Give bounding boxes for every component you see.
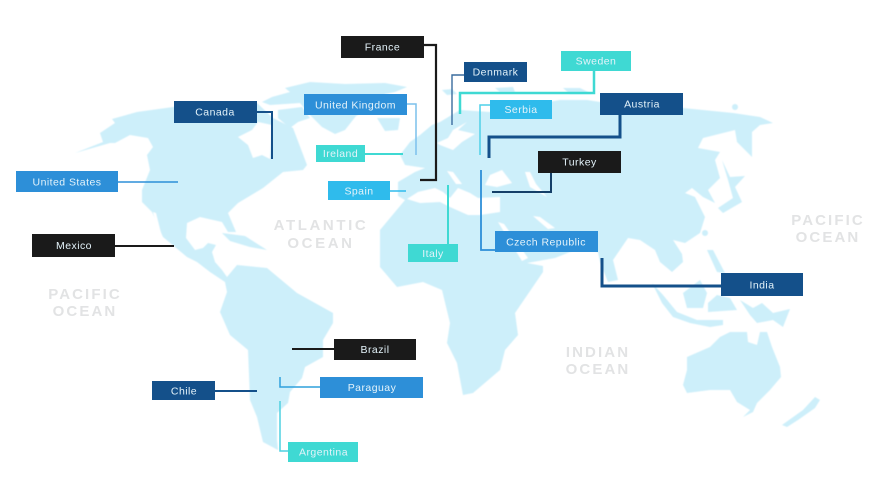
Taiwan (702, 230, 708, 236)
landmass: Iceland (377, 118, 400, 131)
Arctic islands (442, 89, 457, 95)
Sulawesi (708, 295, 737, 312)
callout: Austria (489, 93, 683, 158)
label: Atlantic Ocean: OCEAN (287, 235, 355, 252)
Hudson Bay (238, 122, 272, 159)
callout: Ireland (316, 145, 403, 162)
callout: Czech Republic: Czech Republic (506, 236, 586, 248)
callout: Denmark: Denmark (473, 66, 519, 78)
label: Indian Ocean: OCEAN (566, 361, 630, 378)
callout: Sweden: Sweden (576, 56, 616, 68)
Sumatra and Java (652, 283, 723, 327)
label: Atlantic Ocean: ATLANTIC (274, 217, 368, 234)
Borneo (683, 280, 707, 308)
islands of the Arctic, Asia and Oceania (222, 87, 820, 427)
world map landmasses (75, 82, 820, 450)
label: Pacific Ocean west: OCEAN (53, 303, 117, 320)
callout: Denmark (452, 62, 527, 125)
callout: France (341, 36, 436, 180)
callout: Serbia: Serbia (504, 104, 538, 116)
Adriatic Sea (447, 171, 462, 184)
callout: Sweden (460, 51, 631, 114)
ocean labels (48, 212, 865, 378)
callout: Austria: Austria (624, 98, 660, 110)
Black Sea (485, 170, 512, 187)
Gulf of California (153, 212, 161, 233)
callout: India: India (749, 280, 775, 292)
callout: United Kingdom: United Kingdom (315, 100, 396, 112)
callout: Chile (152, 381, 257, 400)
callout: United States: United States (33, 176, 101, 188)
Baltic Sea (437, 122, 475, 150)
Caribbean islands (222, 233, 267, 250)
callout: Paraguay (280, 377, 423, 398)
Arctic islands (563, 88, 592, 94)
Philippines (707, 250, 725, 273)
callout: Ireland: Ireland (323, 148, 358, 160)
callout: Argentina (280, 401, 358, 462)
Caspian Sea (525, 172, 547, 197)
callout: Italy: Italy (422, 248, 444, 260)
callout: Brazil (292, 339, 416, 360)
Mediterranean Sea (407, 188, 500, 215)
callout: Spain (328, 181, 406, 200)
Baffin Island (278, 107, 310, 128)
callout: Argentina: Argentina (299, 446, 348, 458)
callout: Turkey: Turkey (562, 156, 597, 168)
callout: India (602, 258, 803, 296)
Arctic islands (495, 87, 515, 92)
New Guinea (740, 300, 790, 327)
callout: Spain: Spain (344, 186, 374, 198)
label: Pacific Ocean west: PACIFIC (48, 286, 122, 303)
landmass: the Americas (75, 103, 333, 450)
New Zealand (782, 397, 820, 427)
callout: United States (16, 171, 178, 192)
Japan (718, 160, 745, 213)
callout: Turkey (492, 151, 621, 192)
callout: Canada: Canada (195, 106, 235, 118)
label: Pacific Ocean east: OCEAN (796, 229, 860, 246)
callout: Paraguay: Paraguay (348, 382, 397, 394)
Red Sea (498, 222, 528, 261)
callout: Mexico: Mexico (56, 240, 92, 252)
Persian Gulf (533, 216, 555, 229)
Australia (683, 332, 781, 417)
callout: Serbia (480, 100, 552, 155)
callout: Canada (174, 101, 272, 159)
callout: Chile: Chile (171, 386, 197, 398)
callout: Brazil: Brazil (361, 344, 389, 356)
landmass: Greenland and Arctic islands (262, 82, 407, 134)
callout: United Kingdom (304, 94, 416, 155)
callout: Italy (408, 185, 458, 262)
label: Pacific Ocean east: PACIFIC (791, 212, 865, 229)
callout: France: France (365, 42, 400, 54)
callout: Mexico (32, 234, 174, 257)
callout: Czech Republic (481, 170, 598, 252)
label: Indian Ocean: INDIAN (566, 344, 630, 361)
landmass: Afro-Eurasia (380, 100, 773, 395)
Wrangel island (732, 104, 738, 110)
inland seas cut out of the land (153, 122, 555, 261)
